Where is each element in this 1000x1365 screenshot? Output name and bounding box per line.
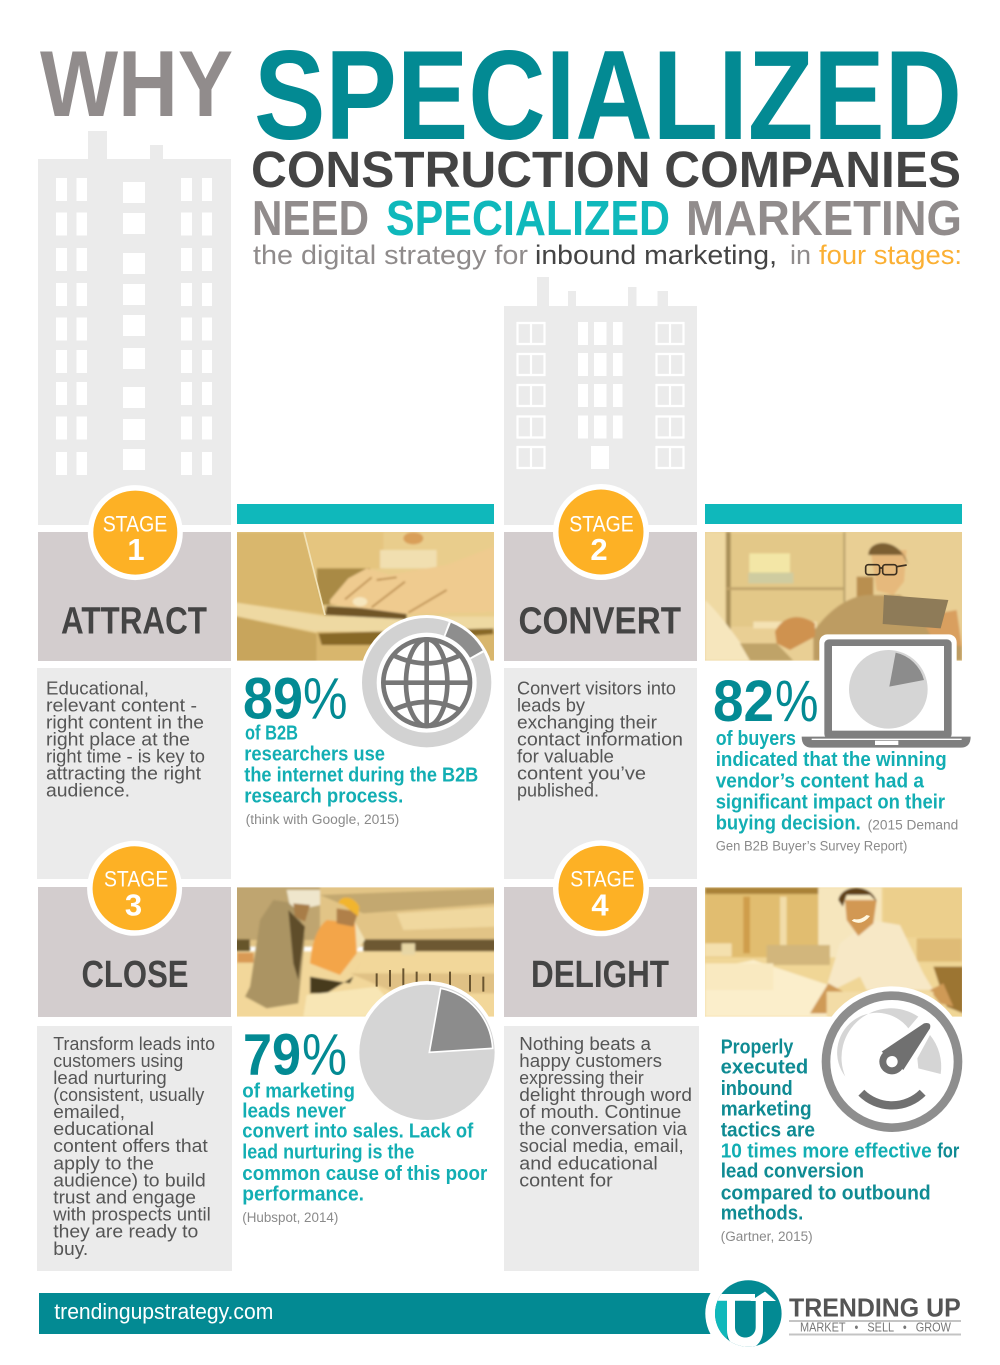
stage badge 4: STAGE — [570, 867, 635, 892]
stage badge 2: 2 — [590, 532, 608, 567]
heading: CLOSE: CLOSE — [82, 954, 188, 996]
building illustration: tall left — [38, 131, 231, 525]
description text: contact information — [517, 728, 683, 749]
stat: 79 percent — [242, 1022, 487, 1225]
stat copy: the internet during the B2B — [244, 764, 478, 786]
wordmark: TRENDING UP — [789, 1293, 961, 1323]
stat: 10 times more effective: lead conversion — [721, 1161, 864, 1183]
stat: 10 times more effective: executed — [721, 1057, 808, 1079]
stat: 10 times more effective: Properly — [721, 1036, 794, 1058]
description text: exchanging their — [517, 711, 657, 732]
figure: 79%: 79 — [243, 1022, 301, 1087]
stat copy: (2015 Demand — [868, 817, 958, 832]
stat copy: researchers use — [244, 743, 385, 765]
stat copy: buying decision. — [716, 812, 861, 834]
description text: leads by — [517, 694, 586, 715]
panel: close — [37, 887, 232, 1271]
stat copy — [244, 722, 478, 827]
title line: need specialized marketing: MARKETING — [686, 192, 962, 246]
description panel — [37, 668, 231, 879]
description text: delight through word — [519, 1084, 692, 1105]
stat: 10 times more effective: compared to outbound — [721, 1182, 931, 1204]
icon: globe ring, 89 percent — [359, 615, 494, 750]
stage badge 1 — [88, 485, 183, 580]
description panel — [504, 1026, 699, 1271]
heading: DELIGHT: DELIGHT — [531, 954, 669, 996]
description text: the conversation via — [519, 1118, 688, 1139]
description panel — [504, 668, 697, 879]
title — [40, 24, 962, 270]
description text: content for — [519, 1169, 613, 1190]
stat copy: (think with Google, 2015) — [246, 812, 399, 827]
description text: Nothing beats a — [519, 1033, 652, 1054]
description text: Transform leads into — [53, 1033, 215, 1054]
stat: 10 times more effective — [721, 1036, 959, 1244]
description text: audience) to build — [53, 1169, 206, 1190]
photo: smiling man at desk — [705, 887, 962, 1017]
description text: and educational — [519, 1152, 658, 1173]
description text: content you’ve — [517, 762, 646, 783]
stat copy — [242, 1080, 487, 1225]
stat copy: common cause of this poor — [242, 1163, 487, 1185]
stat copy: vendor’s content had a — [716, 770, 925, 792]
figure: 89%: 89 — [243, 666, 303, 731]
stat: 10 times more effective: for — [937, 1141, 959, 1163]
panel: delight — [504, 887, 699, 1271]
description text: of mouth. Continue — [519, 1101, 681, 1122]
header block — [38, 532, 231, 661]
panel: attract — [37, 532, 231, 879]
subtitle: four stages: — [819, 240, 962, 270]
stat copy: of marketing — [242, 1080, 355, 1102]
stat copy: Gen B2B Buyer’s Survey Report) — [716, 839, 907, 854]
description text — [52, 1033, 215, 1259]
title line: need specialized marketing: NEED — [252, 192, 369, 246]
footer bar: trendingupstrategy.com — [54, 1299, 273, 1324]
stat copy: convert into sales. Lack of — [242, 1121, 474, 1143]
stage badge 1: STAGE — [103, 512, 167, 537]
description text — [46, 677, 205, 800]
stat: 10 times more effective: inbound — [721, 1078, 793, 1100]
description text: right place at the — [46, 728, 190, 749]
stage badge 3: STAGE — [104, 867, 168, 892]
description text: apply to the — [53, 1152, 154, 1173]
description text: audience. — [46, 779, 130, 800]
stage badge 4 — [553, 840, 649, 936]
description text: relevant content - — [46, 694, 197, 715]
tagline: MARKET • SELL • GROW — [800, 1321, 951, 1335]
stat copy: performance. — [242, 1184, 364, 1206]
description text: right time - is key to — [46, 745, 205, 766]
description panel — [37, 1026, 232, 1271]
subtitle: in — [790, 240, 811, 270]
description text — [517, 677, 683, 800]
description text: Educational, — [46, 677, 149, 698]
stat copy: research process. — [244, 786, 403, 808]
stat copy — [716, 728, 958, 854]
description text: right content in the — [46, 711, 204, 732]
icon: laptop with pie chart — [802, 634, 971, 748]
description text: attracting the right — [46, 762, 201, 783]
figure: 89% — [243, 666, 348, 731]
figure: 82%: % — [775, 669, 818, 734]
description text: emailed, — [53, 1101, 125, 1122]
heading: CONVERT: CONVERT — [518, 600, 681, 642]
teal bar: stage 1 — [237, 504, 494, 524]
description text: trust and engage — [53, 1186, 196, 1208]
icon: pie chart, 79 percent — [356, 981, 498, 1124]
subtitle: the digital strategy for — [253, 240, 528, 270]
description text: published. — [517, 779, 599, 800]
stat copy: indicated that the winning — [716, 749, 947, 771]
description text: Convert visitors into — [517, 677, 676, 698]
stat: 10 times more effective: 10 times more effective — [721, 1141, 932, 1163]
stat: 89 percent — [243, 666, 478, 827]
stat: 10 times more effective: methods. — [721, 1202, 803, 1224]
title word: WHY: WHY — [40, 31, 233, 136]
teal bar: stage 2 — [705, 504, 962, 524]
header block — [504, 532, 697, 661]
description text: with prospects until — [52, 1204, 211, 1225]
stat copy: significant impact on their — [716, 791, 945, 813]
figure: 82% — [713, 669, 818, 734]
stat: 10 times more effective: (Gartner, 2015) — [721, 1229, 813, 1244]
stage badge 2 — [553, 484, 649, 580]
description text: happy customers — [519, 1050, 662, 1071]
description text: social media, email, — [519, 1135, 684, 1156]
figure: 82%: 82 — [713, 669, 774, 734]
stat copy: lead nurturing is the — [242, 1141, 414, 1163]
header block — [38, 887, 231, 1017]
photo: hands typing on laptop — [237, 532, 494, 661]
description text: expressing their — [519, 1067, 644, 1088]
logo: Trending Up — [705, 1280, 961, 1347]
figure: 89%: % — [303, 666, 348, 731]
icon: speedometer gauge — [817, 986, 967, 1137]
building illustration: short centre — [504, 277, 697, 525]
stage badge 3 — [87, 841, 182, 936]
subtitle: inbound marketing, — [535, 240, 777, 270]
stage badge 1: 1 — [127, 532, 145, 567]
stage badge 4: 4 — [591, 888, 609, 923]
title line: need specialized marketing: SPECIALIZED — [386, 192, 670, 246]
stat: 82 percent — [713, 669, 958, 854]
description text: lead nurturing — [53, 1067, 167, 1088]
title line: construction companies: CONSTRUCTION COMPANIES — [251, 141, 961, 198]
stat copy: of buyers — [716, 728, 796, 750]
logo mark — [705, 1280, 782, 1347]
description text: they are ready to — [53, 1221, 198, 1242]
stage badge 3: 3 — [125, 888, 142, 923]
heading: ATTRACT: ATTRACT — [61, 600, 207, 642]
stat copy: (Hubspot, 2014) — [242, 1210, 338, 1225]
description text: buy. — [53, 1238, 88, 1259]
description text: educational — [53, 1118, 154, 1139]
description text: (consistent, usually — [53, 1084, 205, 1105]
stat: 10 times more effective: marketing — [721, 1099, 812, 1121]
header block — [504, 887, 697, 1017]
panel: convert — [504, 532, 697, 879]
description text: content offers that — [53, 1135, 208, 1156]
figure: 79% — [243, 1022, 347, 1087]
figure: 79%: % — [302, 1022, 347, 1087]
stat copy: leads never — [242, 1100, 346, 1122]
photo: construction workers — [230, 880, 497, 1018]
subtitle — [253, 240, 962, 270]
description text — [519, 1033, 692, 1190]
stage badge 2: STAGE — [569, 512, 634, 537]
photo: man with tablet — [705, 532, 962, 661]
footer bar — [39, 1293, 719, 1334]
stat copy: of B2B — [245, 722, 298, 744]
description text: for valuable — [517, 745, 614, 766]
description text: customers using — [53, 1050, 183, 1071]
title line: need specialized marketing — [252, 192, 962, 246]
stat: 10 times more effective: tactics are — [721, 1120, 815, 1142]
